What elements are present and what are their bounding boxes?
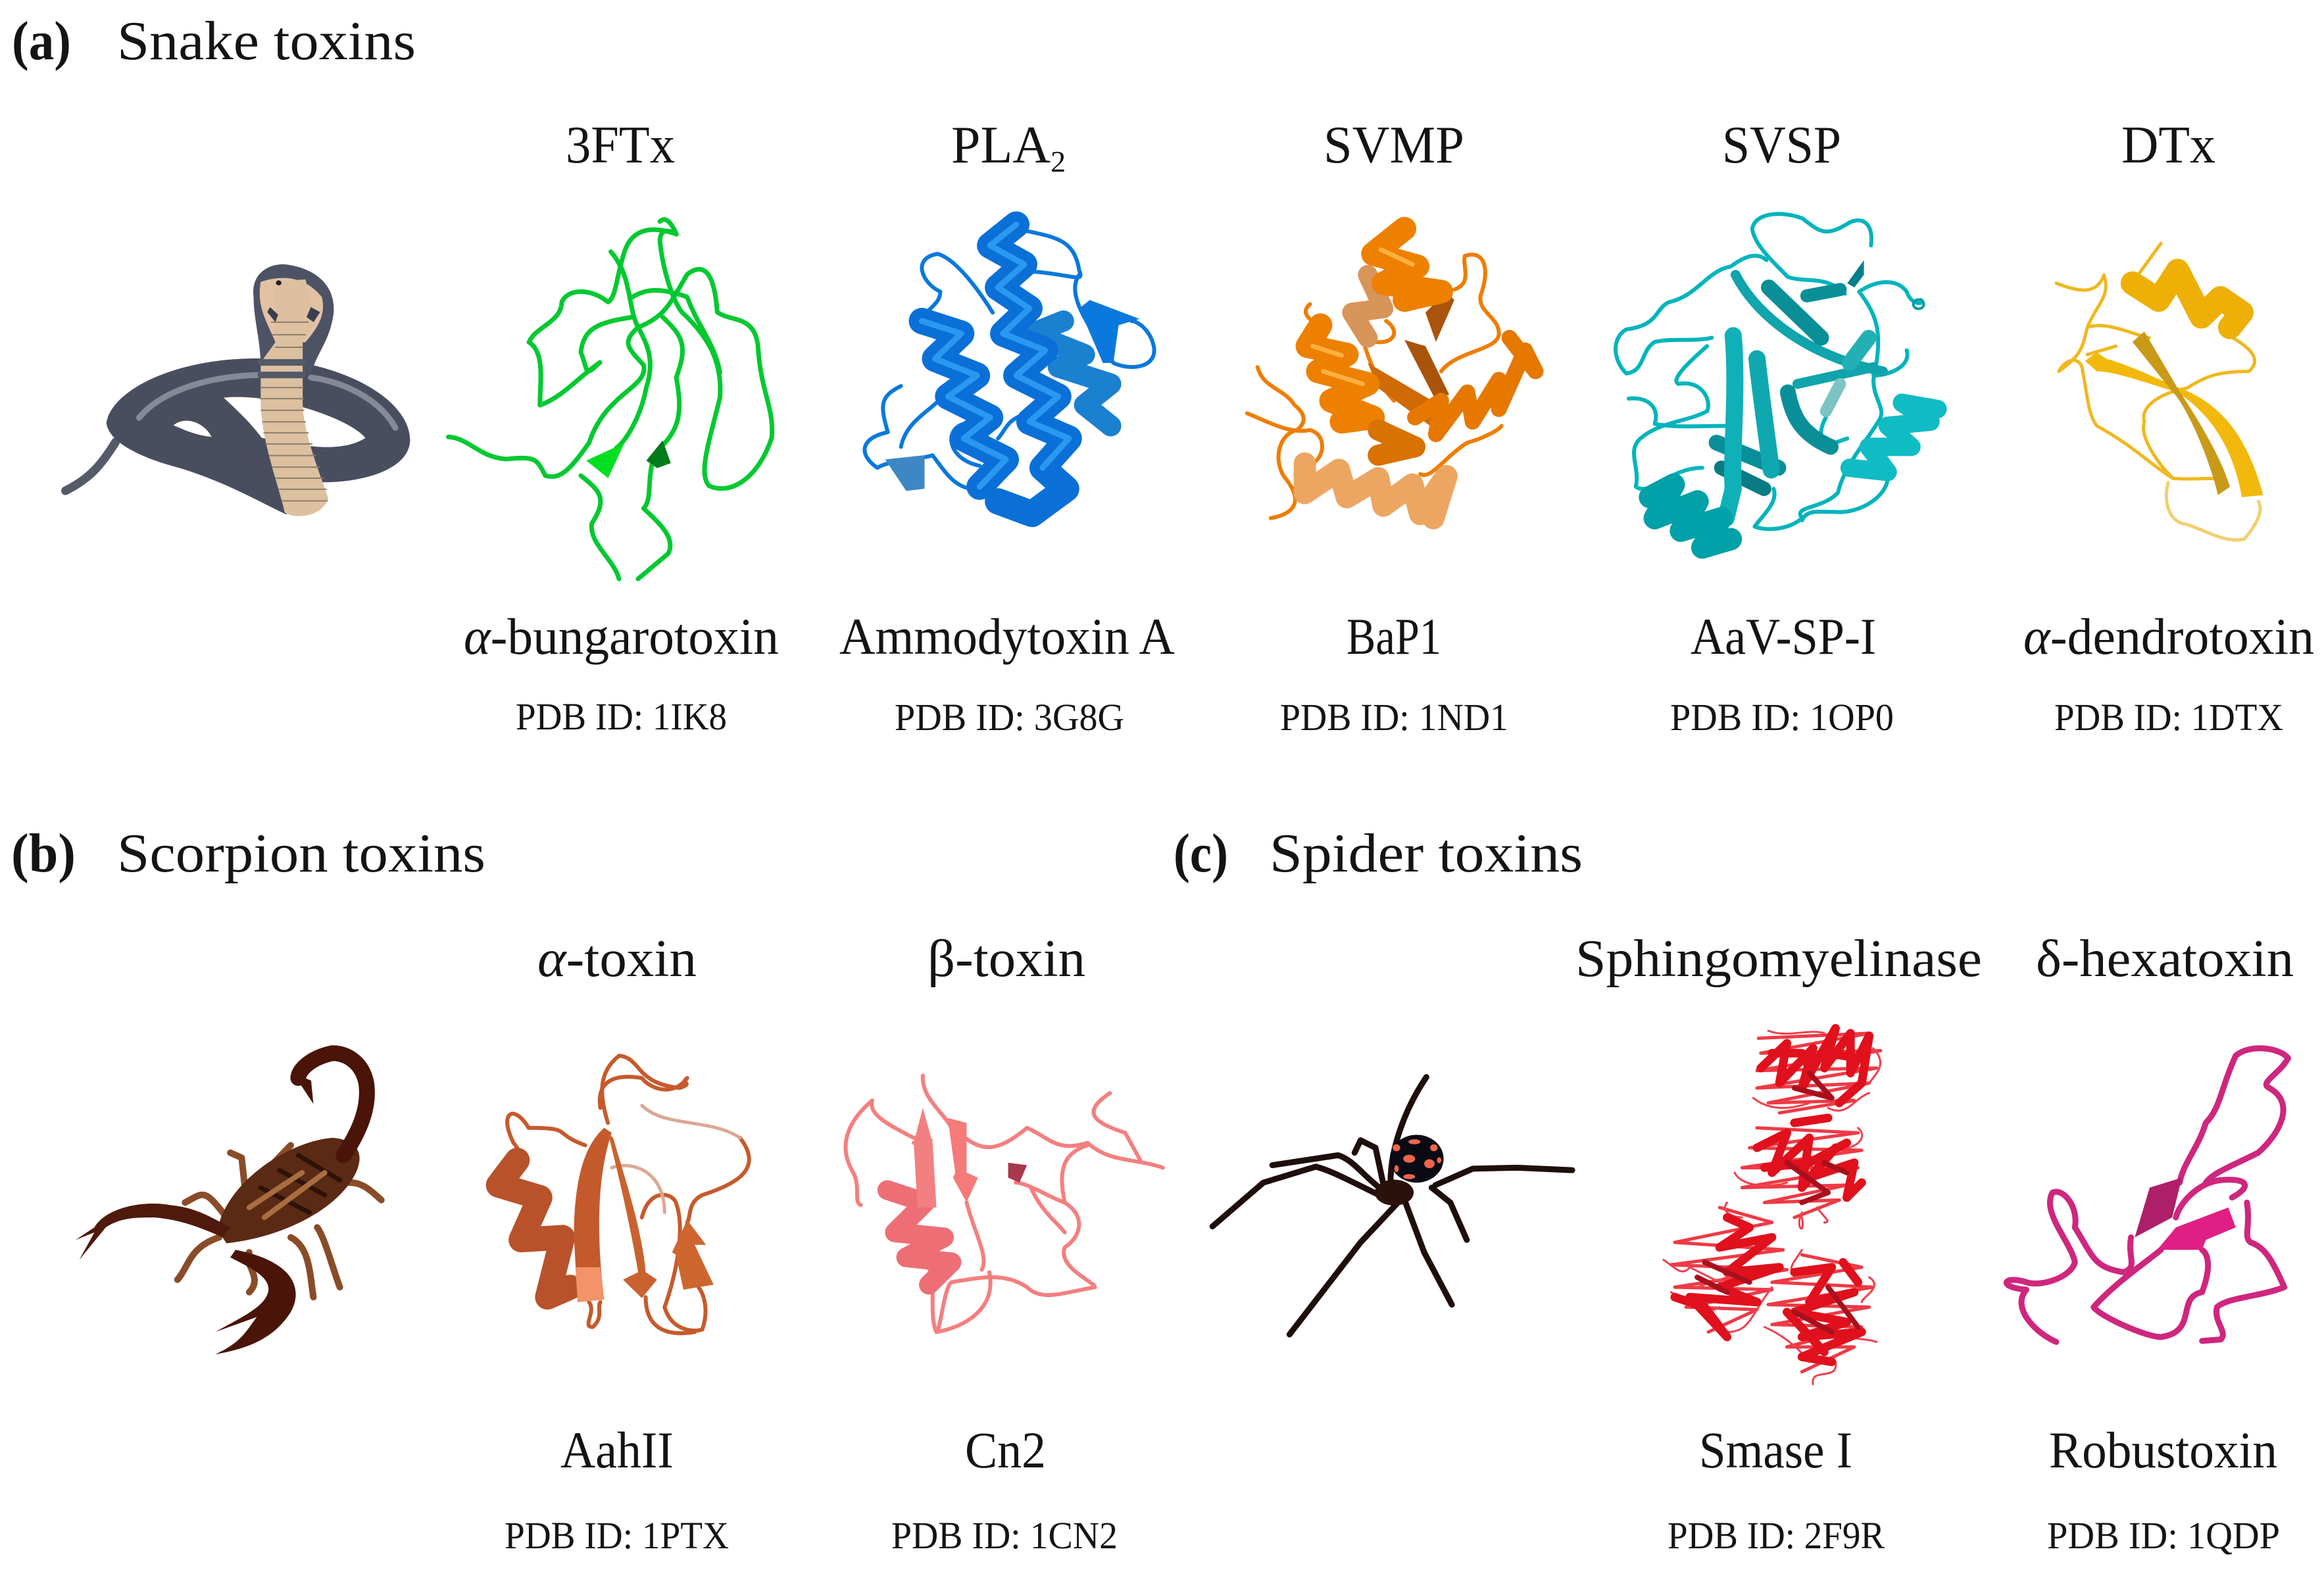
toxin name: AahII: AahII: [560, 1421, 674, 1479]
panel: snake toxins: [12, 11, 2314, 739]
protein structure: AaV-SP-I: [1616, 214, 1938, 547]
protein structure: AahII: [499, 1056, 749, 1333]
PDB ID: 1QDP: PDB ID: 1QDP: [2047, 1514, 2280, 1557]
heading: (c) Spider toxins: Spider toxins: [1270, 823, 1583, 884]
icon: cobra: [65, 264, 410, 516]
heading: alpha-toxin: α-toxin: [537, 930, 697, 988]
toxin name: Robustoxin: Robustoxin: [2049, 1421, 2277, 1479]
heading: (c) Spider toxins: (c): [1174, 823, 1228, 884]
protein structure: Robustoxin: [2006, 1048, 2288, 1342]
column: SVMP: [1247, 116, 1535, 739]
column: 3FTx: [449, 116, 779, 738]
protein structure: BaP1: [1247, 229, 1535, 518]
column: alpha-toxin: [499, 930, 749, 1557]
PDB ID: 1OP0: PDB ID: 1OP0: [1670, 696, 1894, 739]
heading: SVSP: SVSP: [1722, 116, 1841, 174]
protein structure: Smase I: [1664, 1028, 1881, 1385]
column: PLA2: [839, 116, 1175, 739]
toxin name: Smase I: Smase I: [1699, 1421, 1852, 1479]
column: delta-hexatoxin: [2006, 930, 2294, 1557]
toxin name: BaP1: BaP1: [1347, 608, 1441, 665]
heading: PLA2: 2: [1051, 145, 1066, 178]
heading: delta-hexatoxin: δ-hexatoxin: [2036, 930, 2294, 988]
toxin name: Ammodytoxin A: Ammodytoxin A: [839, 608, 1175, 665]
toxin name: AaV-SP-I: AaV-SP-I: [1691, 608, 1876, 665]
heading: (a) Snake toxins: (a): [12, 11, 71, 72]
heading: PLA2: PLA: [951, 116, 1051, 174]
PDB ID: 1ND1: PDB ID: 1ND1: [1280, 696, 1508, 739]
PDB ID: 1IK8: PDB ID: 1IK8: [516, 695, 727, 738]
column: beta-toxin: [846, 930, 1163, 1557]
protein structure: alpha-dendrotoxin: [2056, 243, 2263, 540]
heading: (b) Scorpion toxins: Scorpion toxins: [117, 823, 485, 884]
heading: (a) Snake toxins: Snake toxins: [117, 11, 416, 72]
PDB ID: 3G8G: PDB ID: 3G8G: [895, 696, 1124, 739]
PDB ID: 1CN2: PDB ID: 1CN2: [891, 1514, 1118, 1557]
icon: black widow spider: [1212, 1077, 1572, 1335]
toxin name: alpha-dendrotoxin: α-dendrotoxin: [2023, 608, 2314, 665]
column: SVSP: [1616, 116, 1938, 739]
toxin name: Cn2: Cn2: [965, 1421, 1046, 1479]
protein structure: alpha-bungarotoxin: [449, 220, 772, 579]
column: sphingomyelinase: [1575, 930, 1982, 1557]
heading: beta-toxin: β-toxin: [927, 930, 1085, 988]
toxin name: alpha-bungarotoxin: α-bungarotoxin: [464, 608, 779, 665]
protein structure: Cn2: [846, 1075, 1163, 1332]
PDB ID: 1DTX: PDB ID: 1DTX: [2054, 696, 2283, 739]
panel: scorpion toxins: [11, 823, 1163, 1557]
icon: scorpion: [76, 1053, 382, 1354]
protein structure: Ammodytoxin A: [864, 224, 1154, 514]
heading: Sphingomyelinase: Sphingomyelinase: [1575, 930, 1982, 988]
heading: 3FTx: 3FTx: [566, 116, 675, 174]
heading: (b) Scorpion toxins: (b): [11, 823, 76, 884]
heading: SVMP: SVMP: [1323, 116, 1464, 174]
column: DTx: [2023, 116, 2314, 739]
PDB ID: 1PTX: PDB ID: 1PTX: [505, 1514, 729, 1557]
heading: DTx: DTx: [2121, 116, 2215, 174]
panel: spider toxins: [1174, 823, 2294, 1557]
PDB ID: 2F9R: PDB ID: 2F9R: [1668, 1514, 1885, 1557]
